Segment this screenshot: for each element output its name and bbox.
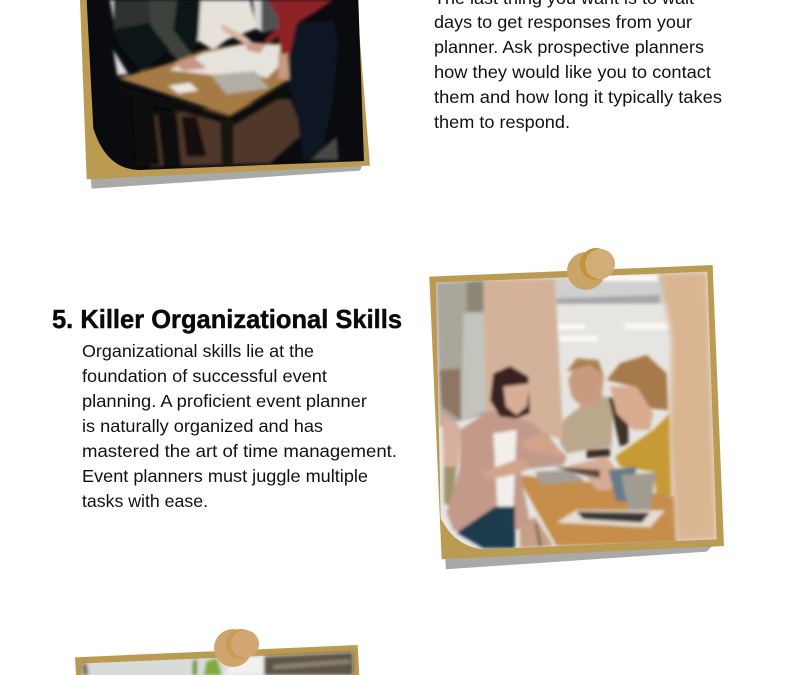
text block: organizational skills description [82,341,397,511]
text block: responsiveness description: them and how long it typically takes [434,87,722,107]
text block: organizational skills description: Organizational skills lie at the [82,341,314,361]
text block: responsiveness description [434,0,722,132]
text block: organizational skills description: tasks with ease. [82,491,208,511]
icon: gold pin on bottom photo [214,629,259,667]
photo: team around a table [80,0,370,189]
photo: bottom frame with greenery [75,645,359,675]
text block: organizational skills description: planning. A proficient event planner [82,391,367,411]
text block: organizational skills description: is naturally organized and has [82,416,323,436]
text block: responsiveness description: planner. Ask prospective planners [434,37,704,57]
heading: 5. Killer Organizational Skills: 5. Killer Organizational Skills [52,304,402,334]
photo: colleagues at a cafe table with pin [429,265,724,569]
text block: responsiveness description: days to get responses from your [434,12,692,32]
icon: gold pin on photo [567,248,615,290]
text block: responsiveness description: how they would like you to contact [434,62,711,82]
text block: organizational skills description: Event planners must juggle multiple [82,466,368,486]
text block: organizational skills description: foundation of successful event [82,366,327,386]
text block: organizational skills description: mastered the art of time management. [82,441,397,461]
text block: responsiveness description: them to respond. [434,112,570,132]
